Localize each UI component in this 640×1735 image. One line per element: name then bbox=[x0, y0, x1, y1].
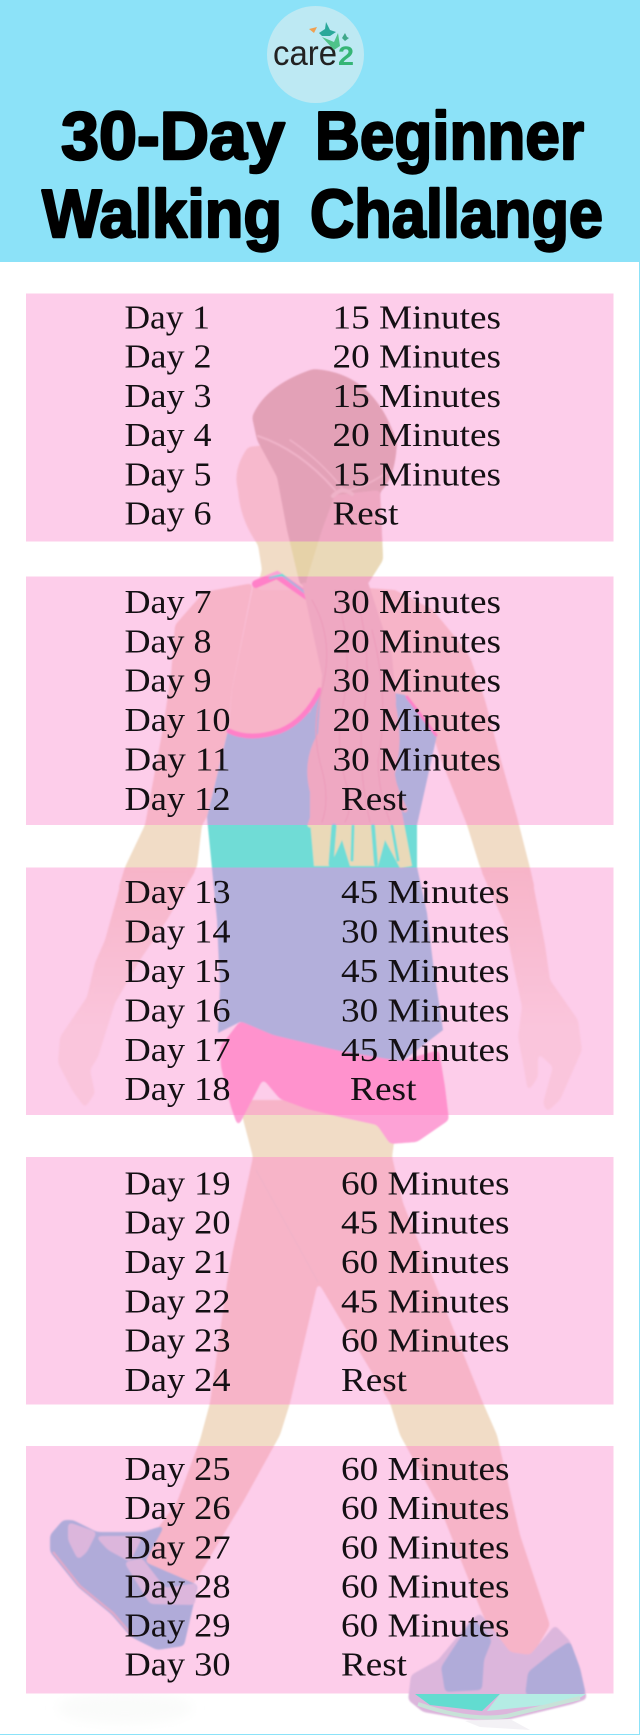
schedule rows: days 13-18: Rest bbox=[350, 1071, 417, 1108]
schedule rows: days 1-6: 15 Minutes bbox=[332, 378, 501, 415]
schedule rows: days 13-18: Day 18 bbox=[124, 1071, 230, 1108]
schedule rows: days 13-18: Day 16 bbox=[124, 992, 230, 1030]
schedule rows: days 25-30: 60 Minutes bbox=[341, 1608, 510, 1644]
schedule rows: days 19-24: 60 Minutes bbox=[341, 1166, 510, 1202]
schedule rows: days 7-12: Day 9 bbox=[124, 662, 212, 700]
schedule rows: days 19-24: Rest bbox=[341, 1362, 408, 1399]
schedule rows: days 13-18: 45 Minutes bbox=[341, 874, 510, 911]
schedule rows: days 7-12: 20 Minutes bbox=[332, 624, 501, 660]
schedule rows: days 7-12 bbox=[124, 584, 501, 818]
schedule rows: days 1-6: Day 1 bbox=[124, 300, 210, 336]
schedule rows: days 13-18: 45 Minutes bbox=[341, 953, 510, 990]
schedule rows: days 19-24: Day 24 bbox=[124, 1362, 230, 1399]
title: Beginner bbox=[315, 98, 584, 174]
schedule rows: days 25-30: Day 26 bbox=[124, 1490, 230, 1527]
schedule rows: days 13-18: 45 Minutes bbox=[341, 1032, 510, 1069]
icon: Care2 logo: care bbox=[273, 34, 337, 73]
title: Walking bbox=[42, 176, 282, 252]
schedule rows: days 25-30: 60 Minutes bbox=[341, 1530, 510, 1566]
schedule rows: days 19-24: Day 20 bbox=[124, 1204, 230, 1242]
schedule rows: days 19-24: 60 Minutes bbox=[341, 1244, 510, 1281]
shoe sole below last panel bbox=[57, 1692, 586, 1730]
schedule rows: days 7-12: 30 Minutes bbox=[332, 584, 501, 621]
schedule rows: days 25-30: 60 Minutes bbox=[341, 1451, 510, 1488]
schedule rows: days 7-12: Rest bbox=[341, 781, 408, 818]
schedule rows: days 19-24: 45 Minutes bbox=[341, 1204, 510, 1242]
panel: days 13-18 bbox=[26, 868, 614, 1115]
title: Challange bbox=[310, 176, 603, 252]
schedule rows: days 1-6: 20 Minutes bbox=[332, 417, 501, 454]
schedule rows: days 7-12: 20 Minutes bbox=[332, 702, 501, 739]
schedule rows: days 19-24: Day 21 bbox=[124, 1244, 230, 1281]
schedule rows: days 7-12: 30 Minutes bbox=[332, 662, 501, 700]
icon: Care2 logo: 2 bbox=[338, 41, 354, 71]
schedule rows: days 1-6: 15 Minutes bbox=[332, 300, 501, 336]
panel: days 19-24 bbox=[26, 1157, 614, 1404]
schedule rows: days 25-30: 60 Minutes bbox=[341, 1568, 510, 1606]
schedule rows: days 7-12: Day 12 bbox=[124, 781, 230, 818]
schedule rows: days 1-6: 20 Minutes bbox=[332, 338, 501, 376]
icon: Care2 logo bbox=[267, 6, 364, 103]
schedule rows: days 25-30: Day 27 bbox=[124, 1530, 230, 1566]
schedule rows: days 7-12: Day 11 bbox=[124, 742, 230, 778]
schedule rows: days 1-6: Day 4 bbox=[124, 417, 212, 454]
schedule rows: days 13-18: Day 15 bbox=[124, 953, 230, 990]
schedule rows: days 1-6: Day 5 bbox=[124, 456, 212, 494]
schedule rows: days 7-12: 30 Minutes bbox=[332, 742, 501, 778]
schedule rows: days 19-24 bbox=[124, 1166, 510, 1399]
woman walking photo, unfaded bbox=[50, 369, 587, 1720]
header band bbox=[0, 0, 640, 262]
schedule rows: days 25-30: Day 25 bbox=[124, 1451, 230, 1488]
schedule rows: days 7-12: Day 10 bbox=[124, 702, 230, 739]
schedule rows: days 1-6: Rest bbox=[332, 496, 399, 532]
schedule rows: days 1-6: Day 2 bbox=[124, 338, 212, 376]
schedule rows: days 1-6: Day 6 bbox=[124, 496, 212, 532]
panel: days 1-6 bbox=[26, 294, 614, 1720]
schedule rows: days 19-24: Day 19 bbox=[124, 1166, 230, 1202]
schedule rows: days 7-12: Day 7 bbox=[124, 584, 212, 621]
title bbox=[42, 98, 603, 252]
schedule rows: days 13-18: 30 Minutes bbox=[341, 992, 510, 1030]
schedule rows: days 13-18 bbox=[124, 874, 510, 1108]
schedule rows: days 25-30: Day 29 bbox=[124, 1608, 230, 1644]
schedule rows: days 13-18: Day 14 bbox=[124, 914, 230, 950]
schedule rows: days 19-24: Day 22 bbox=[124, 1284, 230, 1320]
schedule rows: days 25-30: Day 28 bbox=[124, 1568, 230, 1606]
panel: days 7-12 bbox=[26, 576, 614, 825]
schedule rows: days 13-18: Day 13 bbox=[124, 874, 230, 911]
schedule rows: days 19-24: 60 Minutes bbox=[341, 1322, 510, 1360]
schedule rows: days 19-24: Day 23 bbox=[124, 1322, 230, 1360]
schedule rows: days 1-6: 15 Minutes bbox=[332, 456, 501, 494]
schedule rows: days 25-30: Rest bbox=[341, 1646, 408, 1684]
schedule rows: days 19-24: 45 Minutes bbox=[341, 1284, 510, 1320]
schedule rows: days 25-30: 60 Minutes bbox=[341, 1490, 510, 1527]
schedule rows: days 25-30 bbox=[124, 1451, 510, 1684]
schedule rows: days 1-6 bbox=[124, 300, 501, 532]
schedule rows: days 1-6: Day 3 bbox=[124, 378, 212, 415]
panel: days 25-30 bbox=[26, 1446, 614, 1694]
title: 30-Day bbox=[61, 98, 285, 174]
schedule rows: days 13-18: Day 17 bbox=[124, 1032, 230, 1069]
schedule rows: days 7-12: Day 8 bbox=[124, 624, 212, 660]
schedule rows: days 25-30: Day 30 bbox=[124, 1646, 230, 1684]
schedule rows: days 13-18: 30 Minutes bbox=[341, 914, 510, 950]
